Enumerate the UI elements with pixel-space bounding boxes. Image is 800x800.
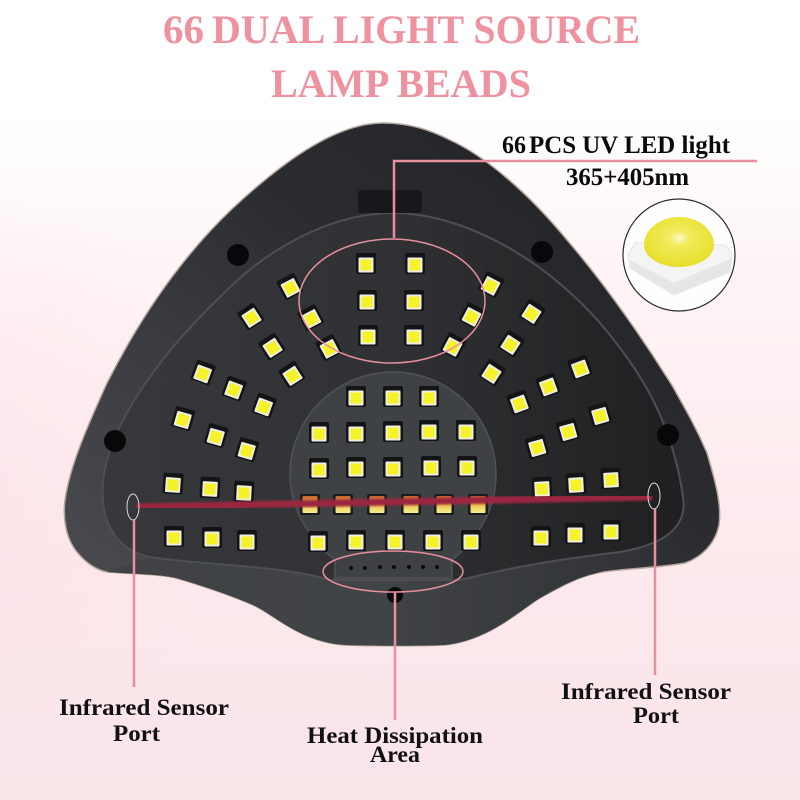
callout: left infrared sensor port xyxy=(127,494,139,687)
LED beads: right side rows xyxy=(506,354,622,547)
vent holes xyxy=(349,565,439,570)
label: right infrared sensor port: Infrared Sensor xyxy=(561,679,731,704)
callout: LED ring and leader xyxy=(299,161,757,363)
nail lamp body xyxy=(64,123,720,646)
inner tray xyxy=(103,213,684,580)
callout text: LED spec: 365+405nm xyxy=(566,164,689,191)
label: right infrared sensor port xyxy=(561,679,731,728)
label: left infrared sensor port: Port xyxy=(113,721,160,746)
label: left infrared sensor port: Infrared Sensor xyxy=(59,695,229,720)
infrared beam xyxy=(136,497,652,507)
LED beads: left side rows xyxy=(162,359,277,551)
LED beads: upper left arms xyxy=(237,273,343,389)
callout: heat dissipation area xyxy=(323,551,463,720)
callout: right infrared sensor port xyxy=(648,483,660,675)
label: right infrared sensor port: Port xyxy=(633,703,679,728)
screw holes xyxy=(104,241,679,603)
callout text: LED spec xyxy=(502,132,731,191)
top clip xyxy=(358,190,422,213)
label: heat dissipation area: Heat Dissipation xyxy=(307,723,483,748)
icon: LED chip in circle xyxy=(623,199,735,311)
title: DUAL LIGHT SOURCE xyxy=(212,7,640,52)
label: heat dissipation area xyxy=(307,723,483,767)
callout text: LED spec: PCS UV LED light xyxy=(529,132,731,159)
lower lip xyxy=(107,546,650,646)
title xyxy=(163,7,640,106)
title: 66 xyxy=(163,7,204,52)
LED beads: top centre group xyxy=(356,253,425,346)
label: left infrared sensor port xyxy=(59,695,229,746)
LED beads: central plate xyxy=(300,386,488,552)
lamp shell xyxy=(64,123,720,646)
callout text: LED spec: 66 xyxy=(502,132,526,159)
title: LAMP BEADS xyxy=(271,61,531,106)
label: heat dissipation area: Area xyxy=(370,742,421,767)
LED beads: upper right arms xyxy=(439,271,546,387)
central LED plate xyxy=(290,372,496,578)
